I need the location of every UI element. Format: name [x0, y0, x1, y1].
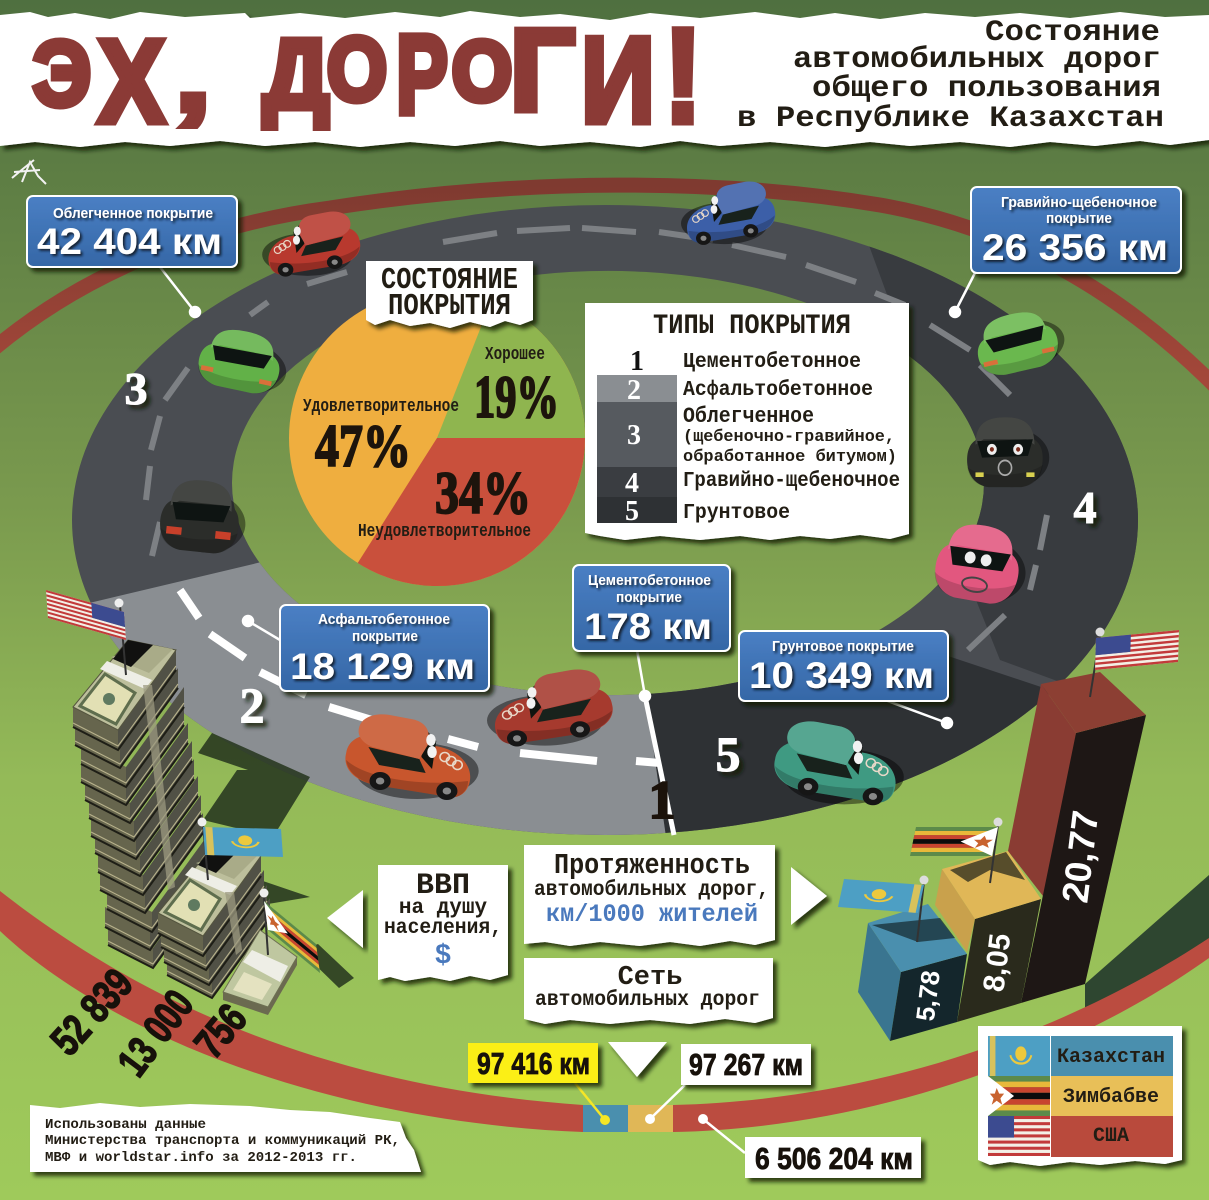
unsatisfactory share: Неудовлетворительное: [358, 522, 531, 542]
bar: Kazakhstan: [858, 904, 967, 1041]
arrow: right to bars: [791, 867, 827, 925]
text box: GDP per capita: населения,: [384, 917, 502, 940]
label: asphalt surface: Асфальтобетонное: [318, 611, 450, 628]
text box: road length: км/1000 жителей: [546, 900, 758, 929]
bar: USA: [1008, 672, 1146, 1003]
title: !: [664, 2, 702, 151]
label: cement surface: покрытие: [616, 589, 682, 606]
car: blue: [681, 182, 775, 245]
shadow of the money stack: [198, 733, 354, 988]
title: О: [452, 24, 512, 118]
label: gravel surface: Гравийно-щебеночное: [1001, 194, 1157, 211]
legend swatches: 2: [627, 375, 641, 406]
subtitle: [737, 16, 1164, 136]
flag: Kazakhstan on bar: [838, 876, 928, 942]
text box: road length: Протяженность: [554, 849, 750, 882]
subtitle: автомобильных дорог: [793, 43, 1161, 77]
car: red top: [262, 212, 360, 277]
bar: Kazakhstan: 5,78: [910, 969, 946, 1023]
bar: Zimbabwe: 8,05: [977, 932, 1017, 994]
title: Х: [98, 16, 165, 148]
label: cement surface: Цементобетонное: [588, 572, 711, 589]
GDP values: [41, 960, 256, 1085]
legend panel: surface types: ТИПЫ ПОКРЫТИЯ: [653, 311, 851, 342]
bar: USA: 20,77: [1054, 808, 1106, 905]
label: cement surface: 178 км: [584, 606, 712, 647]
satisfactory share: [303, 397, 459, 479]
value: Kazakhstan: 13 000: [108, 981, 202, 1085]
surface 4: gravel: [870, 246, 1138, 680]
text box: road network: [524, 958, 773, 1024]
car: green right: [971, 304, 1069, 380]
unsatisfactory share: 34%: [435, 460, 531, 526]
shadow of the bars on the ground: [1085, 875, 1209, 1012]
country rows: Казахстан: [1057, 1046, 1165, 1069]
car: teal: [774, 721, 904, 805]
asphalt white dashes and cement strip: [180, 590, 674, 835]
red ring: lower arc: [0, 891, 1209, 1132]
author signature: [12, 160, 46, 184]
legend labels: Асфальтобетонное: [683, 379, 873, 402]
satisfactory share: Удовлетворительное: [303, 397, 459, 417]
title: Р: [396, 12, 448, 137]
red ring: upper arc: [0, 185, 1209, 390]
subtitle: в Республике Казахстан: [737, 102, 1164, 136]
bar chart: road length per 1000: [858, 672, 1146, 1041]
heading: surface condition: СОСТОЯНИЕ: [381, 263, 518, 298]
text box: road length: автомобильных дорог,: [534, 879, 769, 902]
title: Г: [510, 5, 575, 135]
legend labels: Цементобетонное: [683, 351, 861, 374]
pie chart: surface condition: [289, 290, 585, 586]
legend labels: обработанное битумом): [683, 448, 897, 467]
legend labels: Гравийно-щебеночное: [683, 470, 900, 493]
legend swatches: 4: [625, 468, 639, 499]
numeral 5: 5: [716, 726, 740, 782]
label: gravel surface: [971, 187, 1181, 273]
legend labels: Облегченное: [683, 404, 814, 429]
good share: Хорошее: [485, 345, 545, 365]
heading: surface condition: ПОКРЫТИЯ: [388, 289, 511, 324]
unsatisfactory share: [358, 460, 531, 542]
flag: Kazakhstan on money: [198, 818, 283, 880]
satisfactory share: 47%: [315, 413, 411, 479]
car: black front: [967, 417, 1049, 487]
legend swatches: 5: [625, 496, 639, 527]
source note: Министерства транспорта и коммуникаций РК,: [45, 1133, 400, 1149]
title: И: [581, 12, 655, 148]
legend labels: [683, 351, 900, 525]
value: Zimbabwe: 756: [185, 995, 256, 1067]
title: О: [327, 20, 387, 120]
label: dirt surface: [739, 631, 948, 701]
label: dirt surface: Грунтовое покрытие: [772, 638, 914, 655]
text box: road length: [524, 845, 775, 946]
source note: Использованы данные: [45, 1117, 206, 1133]
label: gravel surface: 26 356 км: [982, 227, 1168, 268]
country rows: Зимбабве: [1063, 1086, 1159, 1109]
heading: surface condition: [366, 261, 533, 328]
legend swatches: 1: [630, 346, 644, 377]
road ring with five surface types: [72, 205, 1138, 835]
good share: 19%: [474, 364, 559, 430]
flag: Zimbabwe on money: [260, 888, 320, 973]
subtitle: общего пользования: [812, 72, 1161, 106]
label: light surface: 42 404 км: [37, 221, 222, 262]
legend panel: surface types: [585, 303, 909, 540]
source note: [30, 1103, 421, 1172]
text box: GDP per capita: ВВП: [416, 869, 470, 903]
surface 5: dirt: [648, 657, 1040, 833]
leader lines and dots: [160, 267, 975, 728]
value: USA: 52 839: [41, 960, 142, 1064]
road numerals: [124, 363, 1096, 782]
good share: [474, 345, 559, 430]
arrow: down to band: [608, 1042, 667, 1077]
numeral 1: 1: [648, 770, 676, 830]
text box: GDP per capita: [378, 865, 508, 981]
car: pink: [931, 518, 1033, 609]
label: cement surface: [573, 565, 730, 651]
label: asphalt surface: покрытие: [352, 628, 418, 645]
road centre dashes: [146, 228, 1047, 650]
legend swatches: 3: [627, 420, 641, 451]
numeral 3: 3: [124, 363, 148, 414]
title: ,: [176, 20, 210, 132]
title: Э: [33, 23, 91, 125]
bar: Zimbabwe: [935, 851, 1041, 1022]
text box: GDP per capita: на душу: [399, 897, 488, 920]
country rows: [1051, 1036, 1173, 1157]
tall stack: USA: [73, 640, 211, 968]
numeral 4: 4: [1074, 482, 1096, 533]
subtitle: Состояние: [985, 16, 1160, 50]
value: USA network: 6 506 204 км: [755, 1141, 913, 1176]
flag: USA on bar: [1090, 628, 1179, 697]
text box: road network: автомобильных дорог: [535, 989, 760, 1012]
legend swatches: [597, 346, 677, 527]
legend labels: Грунтовое: [683, 502, 790, 525]
money stacks: GDP per capita: [73, 640, 297, 1015]
value: Zimbabwe network: 97 267 км: [689, 1047, 803, 1082]
country legend: [978, 1026, 1182, 1166]
label: gravel surface: покрытие: [1046, 210, 1112, 227]
legend labels: (щебеночно-гравийное,: [683, 428, 895, 447]
car: orange: [345, 714, 479, 800]
country rows: США: [1093, 1125, 1129, 1148]
surface 2: asphalt: [91, 562, 666, 835]
car: black rear: [157, 476, 250, 556]
flag: Zimbabwe on bar: [910, 818, 1002, 883]
title: Д: [263, 19, 329, 129]
text box: road network: Сеть: [618, 963, 682, 993]
car: green left: [194, 323, 293, 399]
label: dirt surface: 10 349 км: [749, 655, 934, 696]
numeral 2: 2: [240, 677, 264, 733]
label: light surface: [27, 196, 237, 267]
arrow: left to money: [327, 890, 363, 948]
text box: GDP per capita: $: [435, 941, 451, 972]
value: Kazakhstan network: 97 416 км: [477, 1046, 590, 1081]
header paper strip: [0, 2, 1209, 151]
label: asphalt surface: 18 129 км: [290, 646, 475, 687]
flat stack: Zimbabwe: [223, 930, 297, 1015]
medium stack: Kazakhstan: [158, 846, 270, 998]
label: light surface: Облегченное покрытие: [53, 205, 213, 222]
label: asphalt surface: [280, 605, 489, 691]
flag: USA on money: [46, 590, 126, 675]
flag swatches: [988, 1036, 1050, 1156]
network band segments: [575, 1083, 745, 1153]
car: red front: [487, 669, 613, 746]
source note: МВФ и worldstar.info за 2012-2013 гг.: [45, 1150, 357, 1166]
